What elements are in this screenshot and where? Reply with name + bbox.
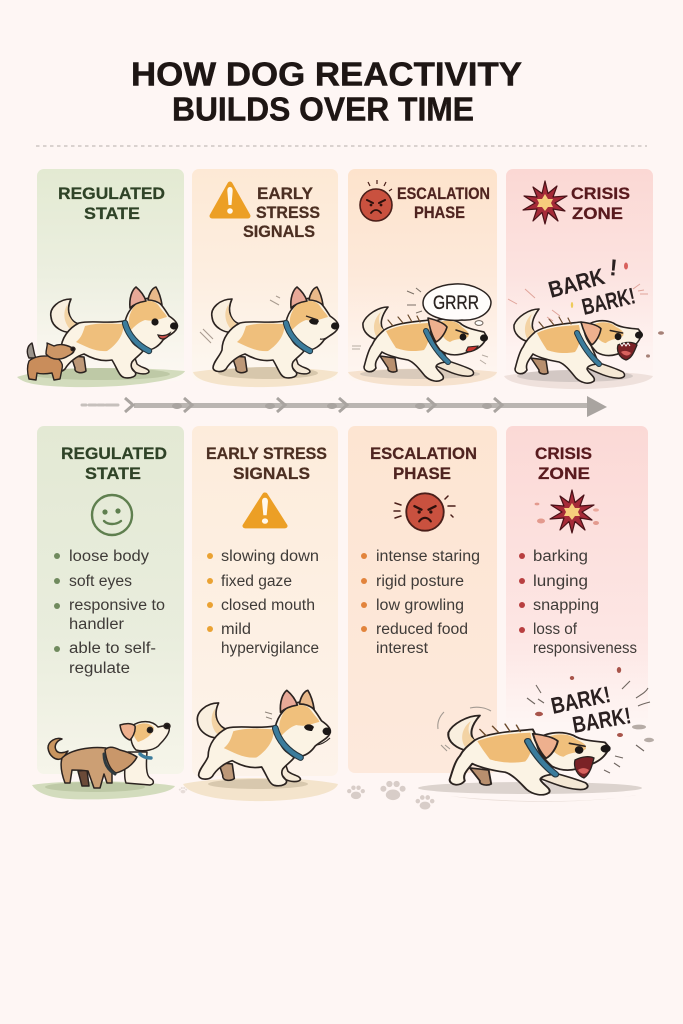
barks: !: [609, 254, 618, 281]
speech bubble: grrr: [407, 284, 491, 325]
bullet list: loose body: [69, 548, 149, 565]
heading: early stress signals: SIGNALS: [243, 222, 315, 241]
heading: early stress signals: EARLY: [257, 184, 314, 203]
barks: [527, 667, 654, 773]
illustration: stressed dog standing: [183, 690, 338, 801]
heading: early stress signals: STRESS: [256, 203, 320, 222]
dog: [438, 707, 613, 795]
bullet list: barking: [533, 548, 588, 565]
icon: warning: [245, 495, 285, 526]
heading: crisis zone: CRISIS: [535, 444, 592, 463]
bullet list: [519, 548, 637, 657]
heading: regulated state: STATE: [84, 204, 140, 223]
illustration: calm dog pair: [32, 722, 175, 799]
bullet list: slowing down: [221, 548, 319, 565]
heading: crisis zone: [571, 184, 630, 223]
barks: BARK: [546, 263, 608, 303]
panel: top early stress signals: [192, 169, 339, 387]
bullet list: fixed gaze: [221, 573, 292, 590]
heading: regulated state: REGULATED: [61, 444, 167, 463]
icon: warning: [212, 184, 248, 216]
bullet list: soft eyes: [69, 573, 132, 590]
paw prints: [179, 781, 434, 810]
icon: smiley: [92, 495, 132, 535]
heading: crisis zone: CRISIS: [571, 184, 630, 203]
cream dog: [120, 722, 170, 785]
heading: regulated state: [58, 184, 165, 223]
heading: escalation phase: [370, 444, 477, 483]
heading: escalation phase: [397, 184, 490, 222]
bullet list: low growling: [376, 597, 464, 614]
heading: escalation phase: ESCALATION: [370, 444, 477, 463]
illustration: lunging barking dog: [418, 667, 654, 802]
heading: early stress signals: [206, 444, 327, 483]
title: BUILDS OVER TIME: [172, 90, 474, 128]
icon: burst: [523, 181, 567, 224]
heading: crisis zone: ZONE: [572, 204, 623, 223]
ground: [348, 369, 497, 386]
title: HOW DOG REACTIVITY: [131, 56, 522, 92]
bullet list: mild: [221, 621, 251, 638]
heading: early stress signals: SIGNALS: [233, 464, 310, 483]
bullet list: [207, 548, 319, 657]
title: [131, 56, 522, 128]
brown dog: [48, 738, 137, 788]
dog: [197, 690, 331, 786]
bullet list: [54, 548, 165, 677]
panel: top regulated state: [17, 169, 185, 387]
barks: BARK!: [549, 681, 613, 719]
heading: regulated state: REGULATED: [58, 184, 165, 203]
bullet list: reduced food: [376, 621, 468, 638]
bullet list: loss of: [533, 621, 578, 638]
illustration: calm dog with puppy: [27, 287, 178, 380]
bullet list: lunging: [533, 573, 588, 590]
icon: angry face: [394, 493, 455, 531]
illustration: growling dog: [352, 307, 488, 381]
panel: top crisis zone: [504, 169, 664, 389]
bullet list: hypervigilance: [221, 640, 319, 657]
heading: early stress signals: [243, 184, 320, 241]
barks: [508, 254, 664, 358]
ground: [193, 368, 338, 387]
panel: escalation details: [348, 426, 497, 773]
heading: crisis zone: [535, 444, 592, 483]
panel: crisis details: [506, 426, 648, 726]
bullet list: intense staring: [376, 548, 480, 565]
panel: top escalation phase: [348, 169, 497, 386]
speech bubble: grrr: GRRR: [433, 293, 479, 314]
bullet list: responsiveness: [533, 640, 637, 657]
heading: crisis zone: ZONE: [538, 464, 590, 483]
bullet list: able to self-: [69, 640, 156, 657]
bullet list: handler: [69, 616, 124, 633]
bullet list: closed mouth: [221, 597, 315, 614]
progress arrow: [82, 396, 607, 417]
puppy: [27, 343, 75, 380]
bullet list: interest: [376, 640, 429, 657]
illustration: barking dog: [514, 309, 645, 383]
bullet list: snapping: [533, 597, 599, 614]
barks: BARK!: [570, 702, 633, 738]
bullet list: regulate: [69, 660, 130, 677]
bullet list: rigid posture: [376, 573, 464, 590]
bullet list: [361, 548, 480, 657]
barks: BARK!: [579, 282, 638, 320]
heading: escalation phase: ESCALATION: [397, 184, 490, 203]
ground: [418, 782, 642, 794]
heading: escalation phase: PHASE: [414, 203, 465, 222]
ground: [32, 781, 175, 799]
heading: escalation phase: PHASE: [393, 464, 451, 483]
icon: angry face: [360, 180, 392, 221]
panel: regulated state details: [37, 426, 184, 774]
ground: [504, 371, 653, 389]
ground: [183, 778, 338, 801]
heading: early stress signals: EARLY STRESS: [206, 444, 327, 463]
heading: regulated state: [61, 444, 167, 483]
icon: burst: [535, 490, 599, 533]
ground: [17, 368, 185, 387]
bullet list: responsive to: [69, 597, 165, 614]
panel: early stress details: [192, 426, 338, 776]
heading: regulated state: STATE: [85, 464, 141, 483]
illustration: stressed dog: [200, 287, 339, 378]
